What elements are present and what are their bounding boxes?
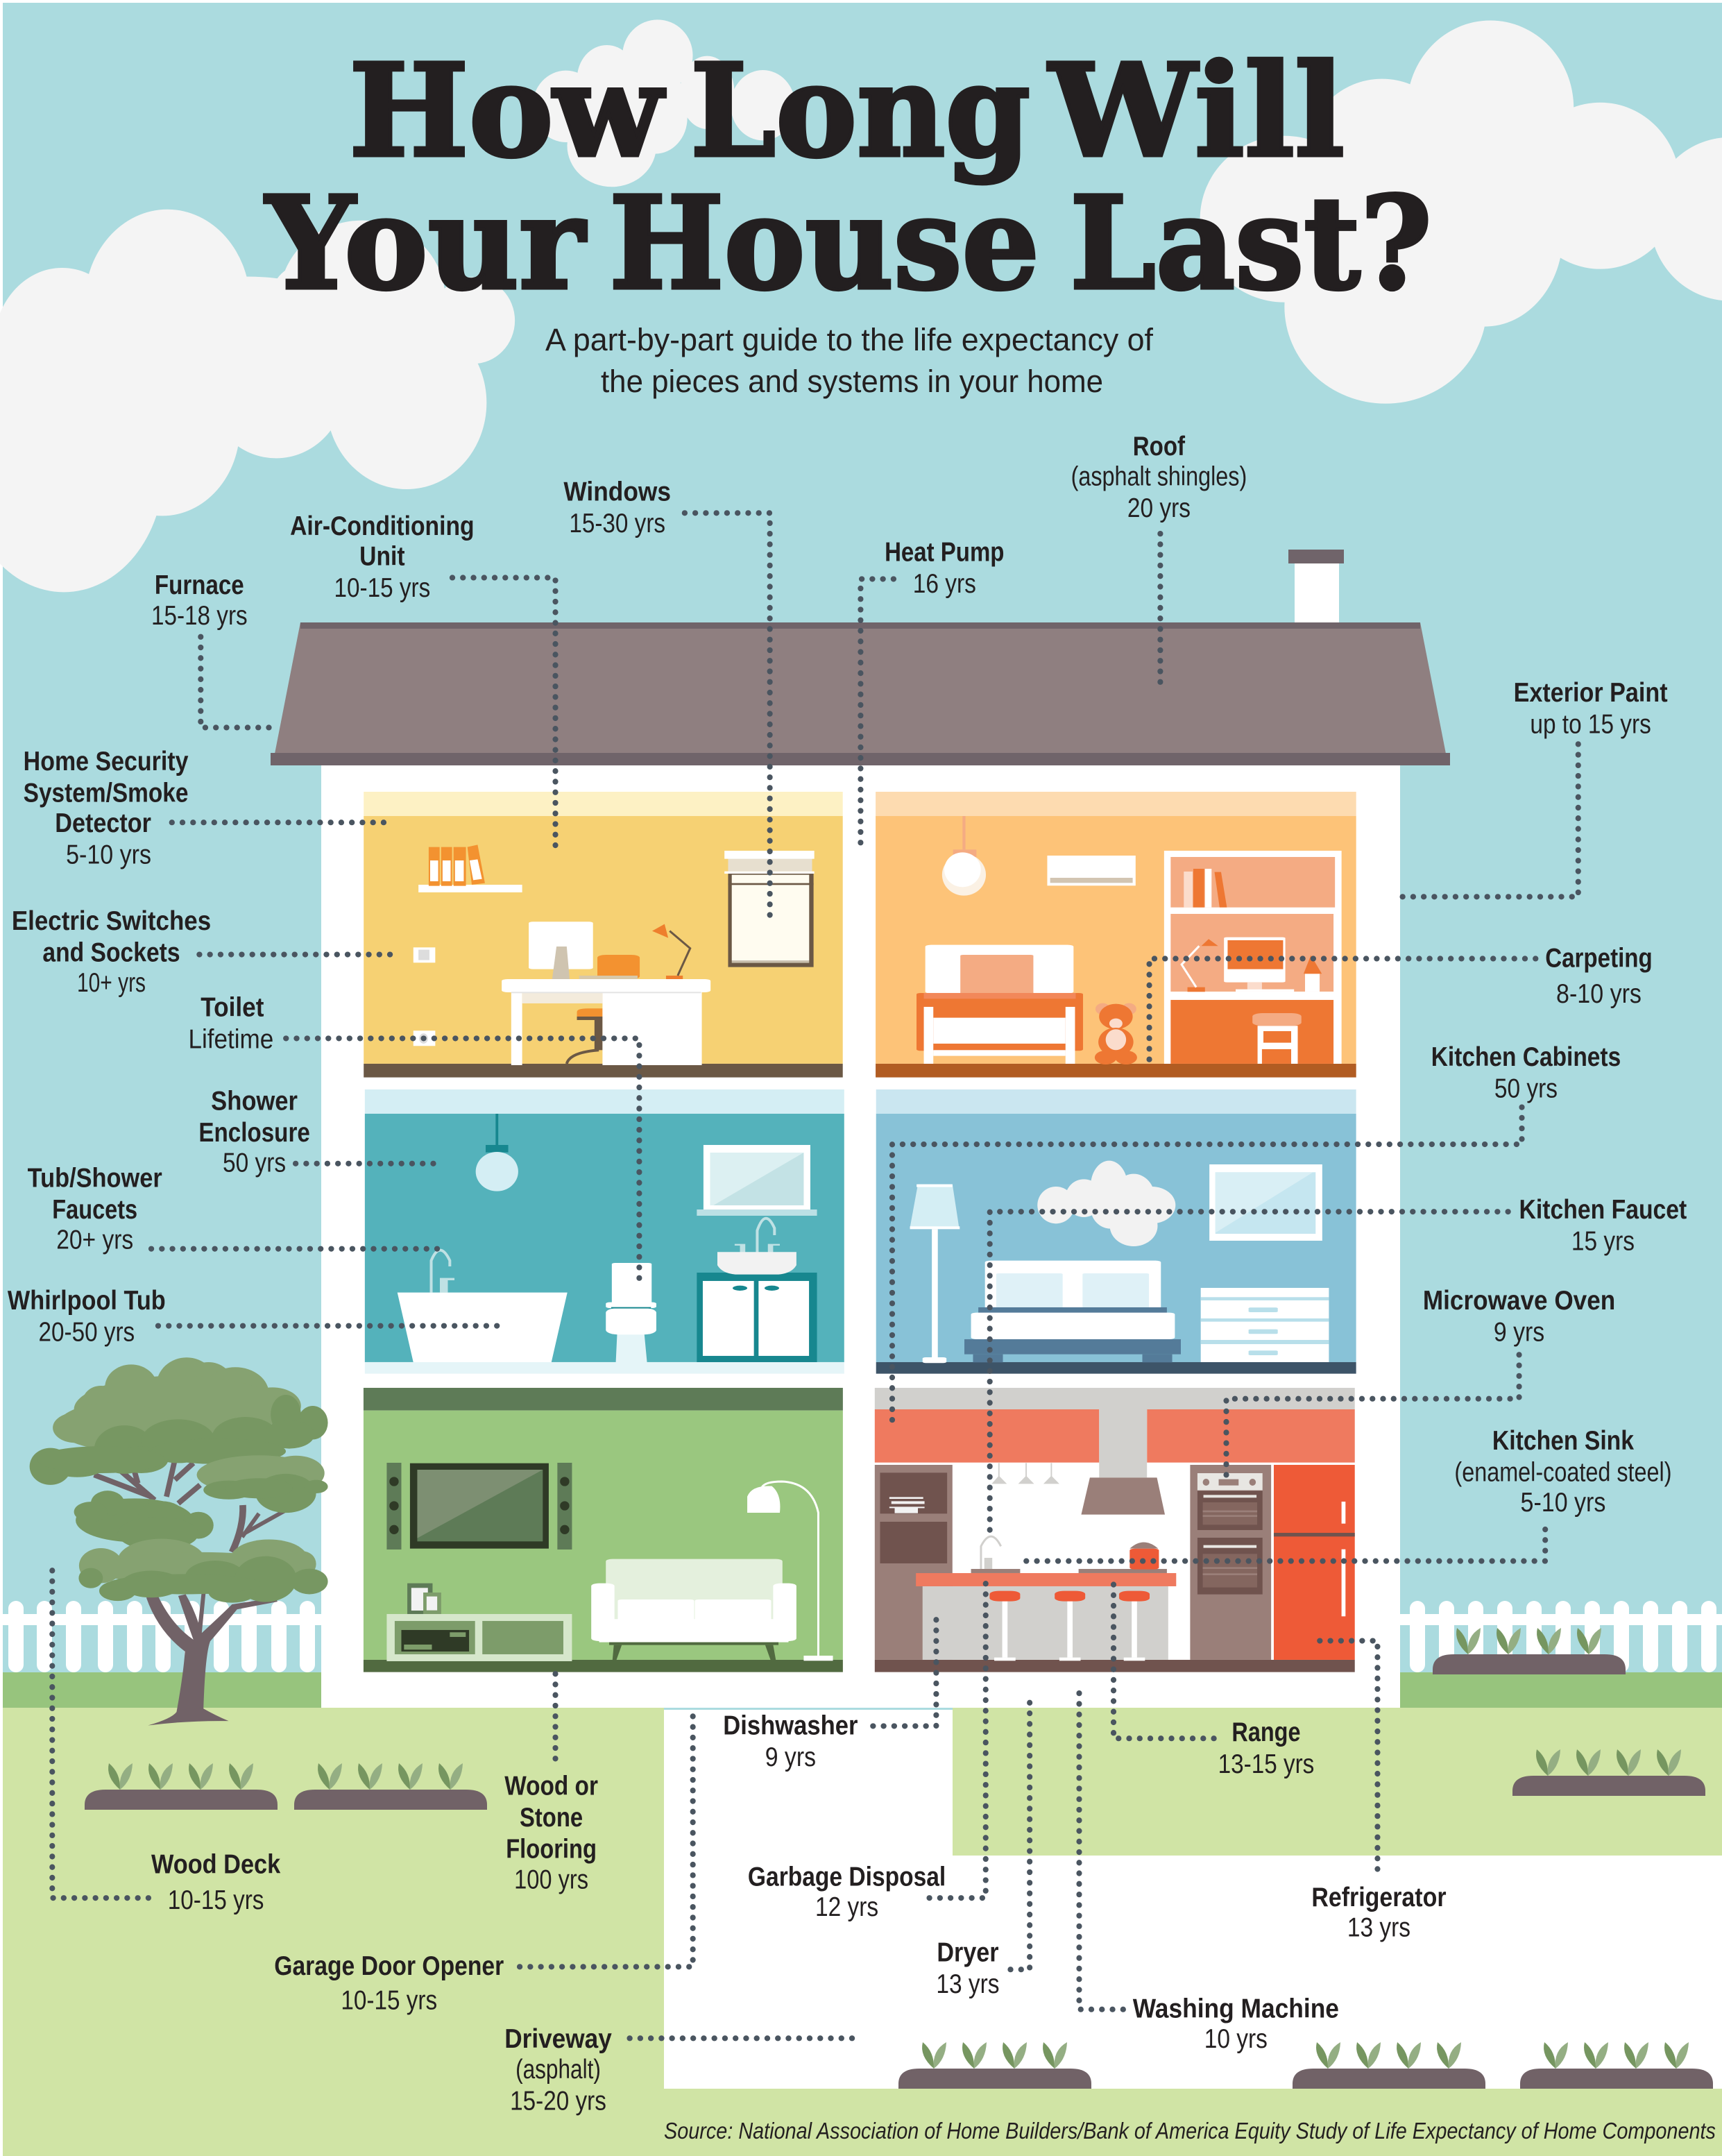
- subtitle: A part-by-part guide to the life expectancy of: [545, 322, 1153, 357]
- label: electric switches: [12, 906, 211, 998]
- dotted leader lines: [52, 513, 1578, 2038]
- bookcase: [1164, 851, 1342, 1064]
- label: driveway: Driveway: [504, 2023, 612, 2054]
- label: exterior paint: up to 15 yrs: [1530, 708, 1651, 739]
- desk and computer: [502, 922, 710, 1065]
- label: garage door opener: [274, 1951, 504, 2016]
- label: toilet: Toilet: [201, 992, 264, 1023]
- label: windows: Windows: [563, 476, 671, 507]
- label: garage door opener: Garage Door Opener: [274, 1951, 504, 1981]
- label: garbage disposal: [748, 1861, 946, 1922]
- label: air conditioning: Unit: [359, 541, 405, 572]
- title: Will: [1048, 36, 1345, 186]
- arc floor lamp: [747, 1482, 833, 1661]
- label: flooring: Flooring: [506, 1834, 597, 1865]
- cloud: right: [1200, 20, 1722, 404]
- label: driveway: 15-20 yrs: [510, 2085, 606, 2116]
- label: whirlpool tub: [8, 1285, 166, 1347]
- label: range: [1218, 1717, 1314, 1779]
- label: wood deck: Wood Deck: [151, 1849, 280, 1879]
- label: whirlpool tub: Whirlpool Tub: [8, 1285, 166, 1316]
- label: flooring: Wood or: [504, 1771, 598, 1801]
- label: furnace: [151, 570, 248, 631]
- label: driveway: (asphalt): [515, 2054, 601, 2085]
- label: refrigerator: Refrigerator: [1311, 1882, 1447, 1912]
- label: kitchen sink: (enamel-coated steel): [1454, 1457, 1672, 1488]
- label: kitchen sink: 5-10 yrs: [1521, 1487, 1605, 1518]
- label: windows: 15-30 yrs: [569, 508, 665, 538]
- house body: [321, 760, 1400, 1708]
- chimney: [1288, 550, 1344, 626]
- mirror: [697, 1145, 817, 1216]
- label: electric switches: Electric Switches: [12, 906, 211, 936]
- ceiling lamp: [476, 1114, 518, 1191]
- label: furnace: Furnace: [155, 570, 244, 600]
- range hood: [1081, 1409, 1165, 1515]
- label: electric switches: 10+ yrs: [77, 967, 146, 998]
- label: air conditioning: Air-Conditioning: [290, 511, 475, 541]
- label: tub faucets: Faucets: [52, 1194, 137, 1225]
- speakers: [386, 1463, 572, 1550]
- label: dishwasher: 9 yrs: [765, 1742, 816, 1772]
- room: living room: [364, 1388, 843, 1672]
- label: flooring: [504, 1771, 598, 1894]
- television: [410, 1463, 549, 1549]
- label: exterior paint: Exterior Paint: [1514, 677, 1668, 708]
- label: wood deck: 10-15 yrs: [168, 1885, 264, 1915]
- label: range: 13-15 yrs: [1218, 1749, 1314, 1779]
- label: kitchen faucet: [1519, 1194, 1687, 1257]
- wall ovens: [1190, 1465, 1271, 1660]
- kitchen island with sink and kettle: [916, 1536, 1176, 1660]
- label: home security: [24, 746, 189, 870]
- room: office: [364, 792, 843, 1078]
- toilet: [606, 1263, 656, 1362]
- teddy bear: [1095, 1003, 1137, 1064]
- cloud: top centre: [532, 19, 795, 187]
- label: microwave oven: 9 yrs: [1494, 1316, 1544, 1347]
- bar stools: [989, 1591, 1150, 1661]
- title: [264, 36, 1432, 319]
- wall mirror: [1209, 1164, 1322, 1241]
- shelf with binders: [418, 844, 522, 892]
- label: roof: Roof: [1133, 431, 1186, 461]
- label: range: Range: [1231, 1717, 1300, 1747]
- roof: [271, 622, 1450, 765]
- label: dishwasher: [723, 1710, 858, 1772]
- label: carpeting: 8-10 yrs: [1556, 978, 1642, 1009]
- fence: left: [3, 1601, 321, 1672]
- label: dryer: Dryer: [937, 1937, 999, 1967]
- dresser: [1201, 1288, 1329, 1362]
- label: dryer: [936, 1937, 1000, 1999]
- floor lamp: [910, 1185, 960, 1363]
- label: garage door opener: 10-15 yrs: [341, 1985, 437, 2016]
- title: How: [349, 36, 666, 186]
- label: kitchen cabinets: 50 yrs: [1494, 1073, 1558, 1104]
- label: exterior paint: [1514, 677, 1668, 739]
- room: bathroom: [365, 1089, 844, 1374]
- label: air conditioning: 10-15 yrs: [334, 572, 430, 603]
- label: heat pump: Heat Pump: [885, 537, 1004, 568]
- title: House: [609, 169, 1039, 319]
- label: heat pump: [885, 537, 1004, 599]
- switch and socket: [414, 947, 435, 1046]
- label: flooring: 100 yrs: [514, 1864, 588, 1894]
- label: garbage disposal: Garbage Disposal: [748, 1861, 946, 1892]
- label: kitchen faucet: 15 yrs: [1571, 1226, 1635, 1257]
- tree: [30, 1357, 328, 1725]
- room: kitchen: [875, 1388, 1355, 1672]
- sky background: [3, 3, 1722, 1710]
- label: kitchen cabinets: [1431, 1042, 1621, 1104]
- refrigerator: [1274, 1465, 1355, 1660]
- bed: [964, 1261, 1181, 1362]
- left cabinet tower: [875, 1465, 953, 1660]
- air conditioner: [1047, 856, 1136, 885]
- label: windows: [563, 476, 671, 538]
- picture frames: [407, 1584, 441, 1615]
- label: washing machine: 10 yrs: [1204, 2023, 1268, 2054]
- bed: [917, 945, 1083, 1064]
- label: flooring: Stone: [520, 1802, 583, 1833]
- label: garbage disposal: 12 yrs: [815, 1892, 878, 1922]
- label: carpeting: [1545, 942, 1653, 1009]
- label: shower enclosure: Shower: [211, 1085, 298, 1116]
- label: refrigerator: 13 yrs: [1347, 1912, 1410, 1943]
- label: whirlpool tub: 20-50 yrs: [38, 1316, 135, 1347]
- label: wood deck: [151, 1849, 280, 1915]
- label: shower enclosure: 50 yrs: [223, 1148, 286, 1178]
- subtitle: the pieces and systems in your home: [601, 364, 1103, 399]
- fence: right: [1400, 1601, 1722, 1672]
- title: Your: [264, 169, 586, 319]
- label: tub faucets: Tub/Shower: [28, 1162, 162, 1193]
- label: tub faucets: [28, 1162, 162, 1255]
- label: dishwasher: Dishwasher: [723, 1710, 858, 1740]
- ground: [3, 1672, 1722, 2156]
- label: shower enclosure: Enclosure: [198, 1117, 310, 1148]
- label: air conditioning: [290, 511, 475, 603]
- label: kitchen faucet: Kitchen Faucet: [1519, 1194, 1687, 1225]
- label: home security: System/Smoke: [24, 778, 188, 808]
- window: [724, 851, 815, 967]
- label: home security: Detector: [55, 808, 151, 838]
- planters: [85, 1628, 1713, 2089]
- label: refrigerator: [1311, 1882, 1447, 1943]
- label: washing machine: [1133, 1994, 1339, 2054]
- label: dryer: 13 yrs: [936, 1969, 1000, 1999]
- label: toilet: Lifetime: [188, 1024, 273, 1054]
- room: bedroom orange: [876, 792, 1356, 1078]
- label: carpeting: Carpeting: [1545, 942, 1653, 973]
- label: home security: 5-10 yrs: [66, 840, 151, 870]
- label: kitchen cabinets: Kitchen Cabinets: [1431, 1042, 1621, 1072]
- label: toilet: [188, 992, 273, 1054]
- label: roof: (asphalt shingles): [1071, 461, 1247, 492]
- label: roof: 20 yrs: [1127, 493, 1191, 523]
- label: shower enclosure: [198, 1085, 310, 1178]
- title: Last?: [1070, 169, 1432, 319]
- labels: [8, 431, 1716, 2144]
- label: kitchen sink: Kitchen Sink: [1492, 1425, 1634, 1456]
- label: microwave oven: [1423, 1285, 1615, 1347]
- label: driveway: [504, 2023, 612, 2116]
- cloud wall art: [1037, 1161, 1175, 1246]
- tv stand: [386, 1614, 572, 1661]
- subtitle: [545, 322, 1153, 399]
- label: heat pump: 16 yrs: [913, 568, 976, 599]
- hanging lights: [991, 1463, 1059, 1484]
- cloud: left: [0, 210, 515, 592]
- vanity: [697, 1219, 817, 1362]
- label: roof: [1071, 431, 1247, 523]
- label: tub faucets: 20+ yrs: [56, 1225, 133, 1255]
- title: Long: [690, 36, 1030, 186]
- label: kitchen sink: [1454, 1425, 1672, 1518]
- pendant light: [942, 816, 986, 896]
- armchair: [591, 1559, 796, 1660]
- label: furnace: 15-18 yrs: [151, 600, 248, 631]
- label: washing machine: Washing Machine: [1133, 1994, 1339, 2024]
- room: bedroom blue: [876, 1089, 1356, 1374]
- label: home security: Home Security: [24, 746, 189, 776]
- label: microwave oven: Microwave Oven: [1423, 1285, 1615, 1316]
- bathtub: [398, 1250, 568, 1362]
- label: electric switches: and Sockets: [42, 937, 180, 967]
